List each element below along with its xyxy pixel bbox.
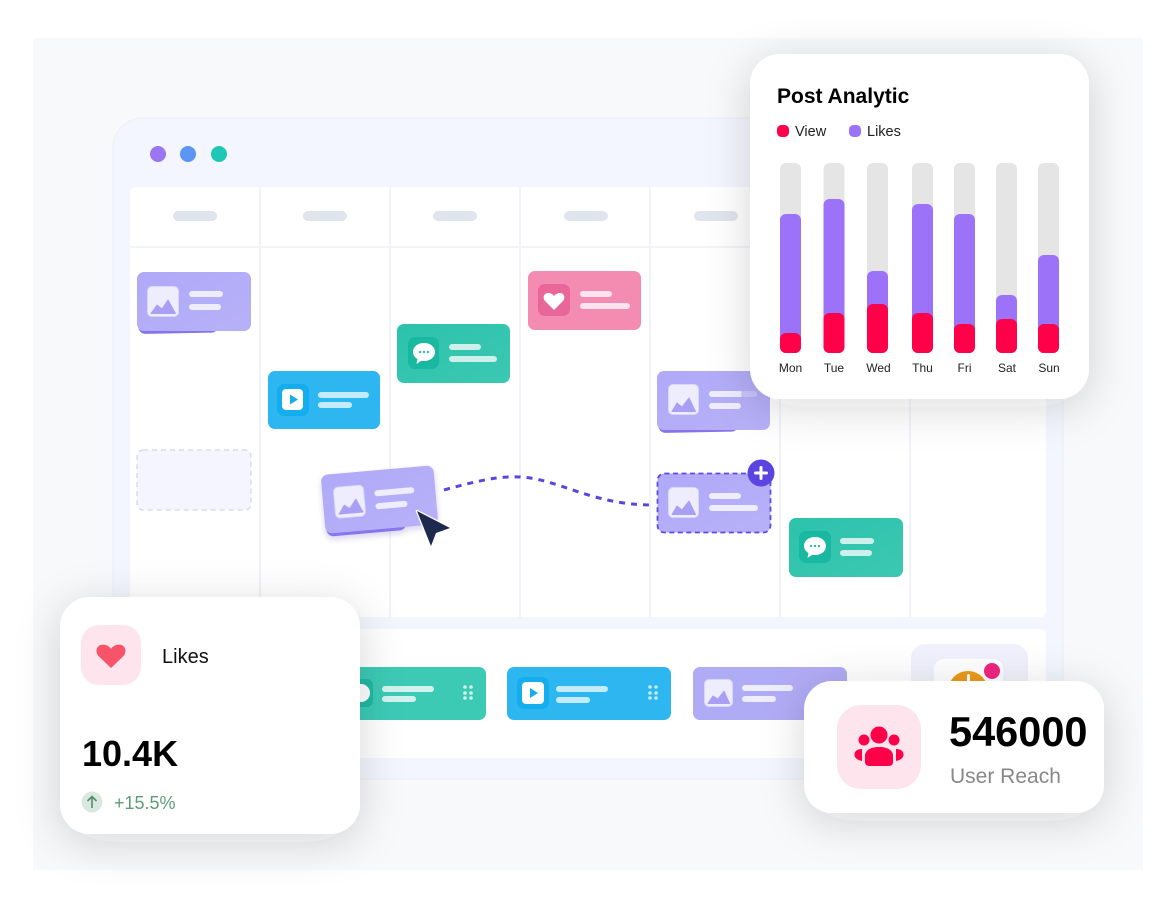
label: Likes: [162, 646, 209, 668]
tray card: video: [507, 667, 671, 720]
bar: Wed: [867, 163, 888, 353]
tray notification tile: [911, 644, 1028, 714]
value: 546000: [949, 708, 1087, 755]
day labels: Tue: [824, 361, 844, 375]
card: drop target: [658, 460, 774, 532]
legend: [777, 124, 901, 140]
label: User Reach: [950, 765, 1061, 788]
icon: heart: [81, 625, 141, 685]
heading: Post Analytic: [777, 85, 910, 108]
day labels: Fri: [958, 361, 972, 375]
tray card: image: [693, 667, 847, 720]
card: image post Monday: [137, 272, 251, 334]
bar: Fri: [954, 163, 975, 353]
card: image post Friday: [657, 371, 770, 433]
icon: orange clock: [948, 671, 988, 711]
icon: plus badge: [748, 460, 774, 486]
calendar grid: [130, 187, 1046, 617]
day labels: Mon: [779, 361, 802, 375]
legend: View: [795, 124, 827, 140]
bar: Thu: [912, 163, 933, 353]
panel: user reach: [804, 681, 1104, 813]
panel: likes: [60, 597, 360, 834]
trend: [82, 792, 176, 813]
day labels: Wed: [866, 361, 891, 375]
day labels: Sat: [998, 361, 1017, 375]
card: comment post: [397, 324, 510, 383]
empty drop placeholder: [137, 450, 251, 510]
calendar window: [113, 118, 1063, 779]
card: dragged image post: [321, 465, 439, 537]
trend: +15.5%: [114, 793, 176, 813]
card: comment post Saturday: [789, 518, 903, 577]
bar: Sun: [1038, 163, 1059, 353]
panel: post analytic: [750, 54, 1089, 399]
day labels: [779, 361, 1060, 375]
value: 10.4K: [82, 733, 178, 774]
window control dots: [150, 146, 227, 162]
bar chart: [779, 163, 1060, 375]
legend: Likes: [867, 124, 901, 140]
day labels: Thu: [912, 361, 933, 375]
bar: Sat: [996, 163, 1017, 353]
tray card: comment: [340, 667, 486, 720]
bottom tray: [130, 629, 1046, 758]
window frame: [113, 118, 1063, 779]
notification dot: [984, 663, 1000, 679]
day labels: Sun: [1038, 361, 1060, 375]
bar: Tue: [824, 163, 844, 353]
dashed drag path: [444, 477, 654, 505]
card: liked post: [528, 271, 641, 330]
bar: Mon: [780, 163, 801, 353]
card: video post: [268, 371, 380, 429]
icon: cursor arrow: [417, 511, 450, 546]
icon: user group: [837, 705, 921, 789]
